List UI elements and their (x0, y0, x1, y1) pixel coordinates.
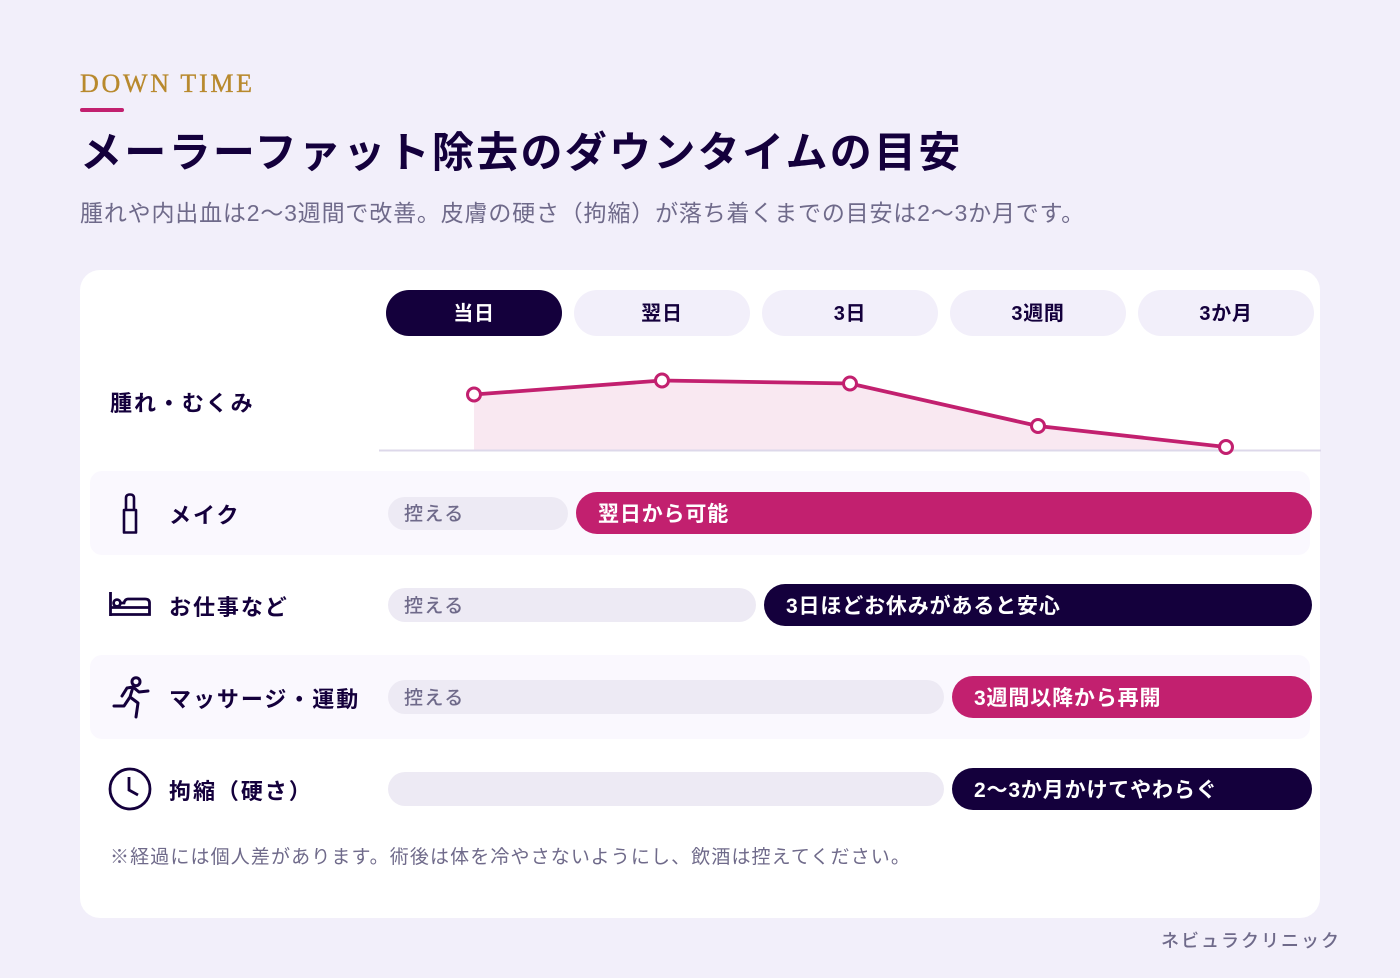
pill: 当日 (386, 290, 562, 336)
eyebrow: DOWN TIME: DOWN TIME (80, 69, 255, 98)
pill: 当日: 当日 (453, 303, 495, 325)
bar: refrain: 控える (404, 504, 465, 525)
pill: 3週間 (950, 290, 1126, 336)
pill: 翌日 (574, 290, 750, 336)
label: メイク: メイク (169, 503, 240, 528)
pill: 3か月 (1138, 290, 1314, 336)
icon: runner (112, 676, 150, 718)
bar: refrain: 控える (404, 596, 465, 617)
row background (90, 471, 1310, 555)
bar: from next day: 翌日から可能 (598, 503, 729, 526)
bar: refrain (388, 680, 944, 714)
bar: 2-3 months (952, 768, 1312, 810)
timeline header pills (386, 290, 1314, 336)
accent rule (80, 108, 124, 112)
icon: bed (109, 592, 151, 616)
bar: from 3 weeks: 3週間以降から再開 (974, 687, 1161, 710)
row: contracture (108, 768, 1312, 810)
bar: from next day (576, 492, 1312, 534)
subtitle: 腫れや内出血は2〜3週間で改善。皮膚の硬さ（拘縮）が落ち着くまでの目安は2〜3か月です。 (80, 200, 1085, 226)
label: お仕事など: お仕事など (169, 595, 289, 620)
title: メーラーファット除去のダウンタイムの目安 (80, 129, 963, 176)
icon: clock (108, 768, 152, 810)
bar: refrain (388, 588, 756, 622)
bar: 3 days off: 3日ほどお休みがあると安心 (786, 595, 1061, 618)
bar: refrain: 控える (404, 688, 465, 709)
panel: timeline card (80, 270, 1320, 918)
bar: 3 days off (764, 584, 1312, 626)
icon: lipstick (122, 493, 138, 534)
bar: refrain (388, 497, 568, 530)
pill: 3日: 3日 (834, 303, 866, 325)
credit: clinic name: ネビュラクリニック (1161, 931, 1341, 951)
row: work (109, 584, 1312, 626)
label: 拘縮（硬さ）: 拘縮（硬さ） (169, 779, 313, 804)
pill: 翌日: 翌日 (641, 303, 683, 325)
row: massage and exercise (112, 676, 1312, 718)
footnote: ※経過には個人差があります。術後は体を冷やさないようにし、飲酒は控えてください。 (110, 847, 911, 868)
pill: 3日 (762, 290, 938, 336)
bar: waiting (388, 772, 944, 806)
label: swelling: 腫れ・むくみ (110, 391, 255, 416)
bar: 2-3 months: 2〜3か月かけてやわらぐ (974, 779, 1218, 802)
row background (90, 655, 1310, 739)
pill: 3か月: 3か月 (1199, 303, 1253, 325)
pill: 3週間: 3週間 (1011, 303, 1065, 325)
bar: from 3 weeks (952, 676, 1312, 718)
label: マッサージ・運動: マッサージ・運動 (169, 687, 360, 712)
row: makeup (122, 492, 1312, 534)
